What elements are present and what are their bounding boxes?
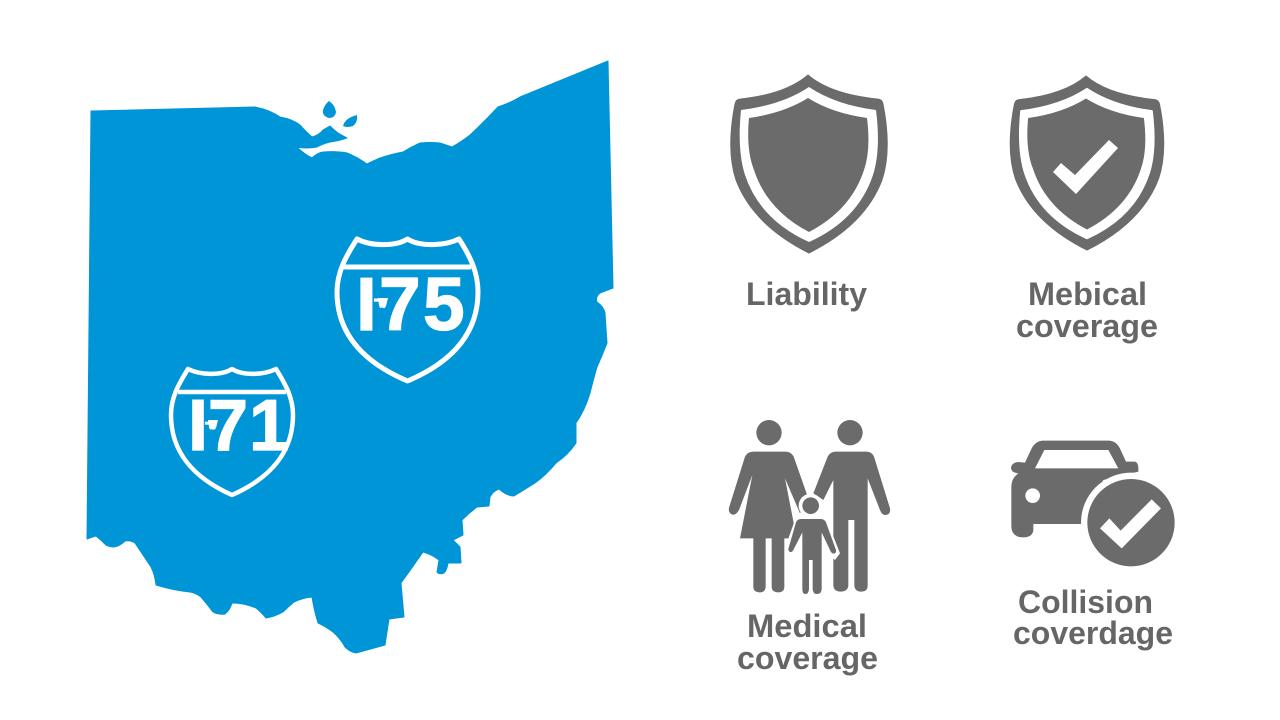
road number text: 1 <box>249 386 289 466</box>
road number text: 7 <box>379 262 421 346</box>
label: Mebical coverage <box>1016 276 1158 344</box>
label: Medical coverage <box>737 608 878 676</box>
label: Collision coverdage: Collision <box>1018 584 1153 620</box>
road number text: - <box>374 291 379 308</box>
label: Liability: Liability <box>746 276 867 312</box>
road number text: I <box>356 262 377 346</box>
label: Medical coverage: Medical <box>747 608 867 644</box>
road number text: I <box>188 386 208 466</box>
icon: plain shield <box>731 75 887 253</box>
icon: lake island <box>323 101 336 118</box>
road sign: I-75 shield <box>337 239 478 381</box>
map: Ohio state silhouette <box>87 61 613 653</box>
label: Collision coverdage: coverdage <box>1013 615 1173 651</box>
road sign: I-71 shield <box>171 369 293 495</box>
icon: family <box>729 420 890 597</box>
icon: shield with check <box>1010 76 1164 250</box>
label: Mebical coverage: coverage <box>1016 308 1158 344</box>
label: Medical coverage: coverage <box>737 640 878 676</box>
road number text: 7 <box>208 386 248 466</box>
label: Mebical coverage: Mebical <box>1028 276 1147 312</box>
road number text: 5 <box>423 262 465 346</box>
label: Collision coverdage <box>1013 584 1173 651</box>
icon: lake island small <box>343 115 357 127</box>
icon: car with check <box>1011 441 1181 573</box>
road number text: - <box>205 414 210 430</box>
